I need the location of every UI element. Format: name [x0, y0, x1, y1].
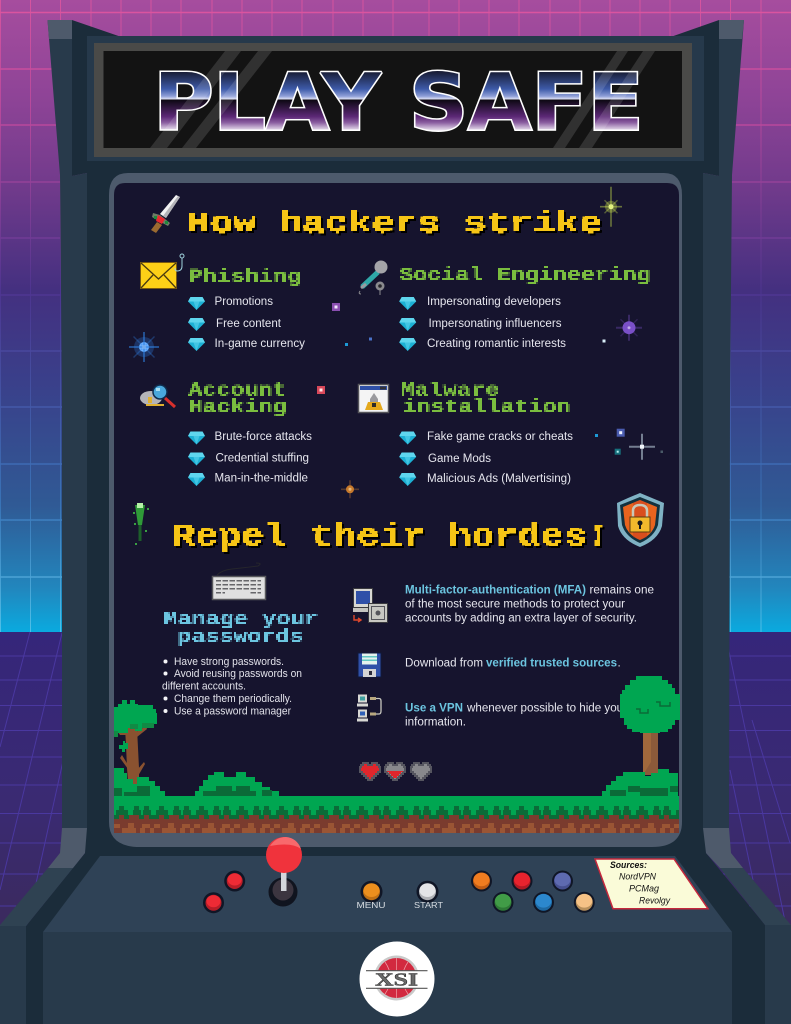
left tree: [114, 700, 157, 795]
icon: sword: [151, 195, 180, 233]
list: password tips: Have strong passwords.: [174, 656, 284, 668]
text: vpn: information.: [405, 717, 466, 729]
list: password tips: [162, 656, 302, 718]
list: password tips: Avoid reusing passwords on: [174, 668, 302, 680]
heading: Social Engineering: Social Engineering: [399, 264, 650, 286]
heading: Malware installation: [400, 379, 570, 418]
icon: window with rocket: [358, 384, 388, 412]
buttons: right colour cluster: [471, 870, 595, 913]
text: mfa: remains one: [590, 584, 654, 596]
heading: Manage your passwords: [163, 608, 318, 648]
text: vpn: Use a VPN: [405, 703, 463, 715]
panel: manage your passwords: [162, 563, 318, 718]
list: phishing methods: In-game currency: [214, 338, 305, 350]
icon: computer and safe: [353, 588, 388, 622]
heading: Repel their hordes!: Repel their hordes!: [172, 520, 610, 555]
panel: mfa advice: [353, 584, 654, 624]
sources note: [595, 859, 708, 909]
button: menu: [356, 881, 386, 910]
buttons: left red pair: [203, 870, 245, 913]
list: password tips: different accounts.: [162, 680, 246, 692]
icon: networked computers: [357, 694, 381, 722]
heading: Account Hacking: Hacking: [188, 396, 286, 418]
button: start: [414, 881, 443, 910]
star field: [129, 187, 663, 498]
marquee with title: [87, 36, 704, 161]
icon: floppy disk: [358, 653, 381, 677]
right tree: [620, 676, 680, 775]
icon: envelope with hook: [140, 254, 184, 288]
list: social engineering methods: [399, 296, 566, 351]
logo: XSI: XSI: [375, 970, 418, 990]
text: mfa: accounts by adding an extra layer of security.: [405, 612, 637, 624]
text: vpn: whenever possible to hide your: [466, 703, 627, 715]
heading: Phishing: Phishing: [188, 266, 301, 288]
heading: Malware installation: Malware: [400, 379, 499, 401]
text: verified sources: [405, 658, 621, 670]
heading: Malware installation: installation: [402, 396, 570, 418]
list: account hacking methods: Credential stuffing: [216, 453, 309, 465]
bushes: [114, 768, 678, 796]
list: malware methods: [399, 431, 573, 486]
panel: trusted sources advice: [358, 653, 621, 677]
panel: vpn advice: [357, 694, 627, 729]
heading: How hackers strike: How hackers strike: [187, 207, 602, 242]
sources note: PCMag: [629, 884, 660, 894]
pixel scenery: [114, 676, 680, 833]
icon: life hearts: [360, 763, 431, 780]
panel: social engineering: [359, 260, 650, 351]
list: account hacking methods: Brute-force attacks: [214, 431, 312, 443]
icon: disk under magnifier: [140, 385, 175, 407]
panel: account hacking: [140, 379, 312, 486]
text: verified sources: Download from: [405, 658, 483, 670]
list: malware methods: Game Mods: [428, 453, 491, 465]
list: password tips: Change them periodically.: [174, 693, 292, 705]
sources note: Sources:: [610, 860, 647, 871]
text: mfa: [405, 584, 654, 624]
control panel: [43, 837, 732, 1024]
panel: phishing: [140, 254, 305, 351]
text: vpn: [405, 703, 627, 729]
list: account hacking methods: Man-in-the-middle: [214, 473, 308, 485]
icon: padlock shield: [617, 493, 664, 547]
list: malware methods: Malicious Ads (Malvertising): [427, 473, 571, 485]
heading: Manage your passwords: Manage your: [163, 608, 318, 630]
list: account hacking methods: [188, 431, 312, 486]
heading: Account Hacking: [188, 379, 286, 418]
game screen: [114, 183, 680, 833]
list: phishing methods: Free content: [216, 318, 282, 330]
icon: green falling comet: [133, 503, 149, 545]
list: phishing methods: Promotions: [214, 296, 273, 308]
list: phishing methods: [188, 296, 305, 351]
ground: [114, 796, 679, 833]
screen bezel: [109, 173, 682, 847]
list: social engineering methods: Impersonating developers: [427, 296, 561, 308]
sources note: NordVPN: [619, 872, 656, 882]
icon: keyboard: [212, 563, 266, 600]
list: social engineering methods: Impersonating influencers: [428, 318, 562, 330]
heading: Manage your passwords: passwords: [177, 626, 303, 648]
button: start: START: [414, 900, 443, 910]
joystick: [266, 837, 302, 906]
list: malware methods: Fake game cracks or cheats: [427, 431, 573, 443]
heading: Account Hacking: Account: [188, 379, 286, 401]
text: mfa: Multi-factor-authentication (MFA): [405, 584, 586, 596]
logo: XSI: [360, 942, 434, 1016]
text: verified sources: verified trusted sources: [486, 658, 617, 670]
title: PLAY SAFE: PLAY SAFE: [154, 58, 644, 148]
sources note: Revolgy: [639, 896, 671, 906]
list: password tips: Use a password manager: [174, 706, 291, 718]
icon: microphone: [359, 260, 388, 295]
panel: malware installation: [358, 379, 573, 486]
text: mfa: of the most secure methods to protect your: [405, 598, 625, 610]
button: menu: MENU: [356, 900, 386, 910]
text: verified sources: .: [618, 658, 621, 670]
list: social engineering methods: Creating romantic interests: [427, 338, 566, 350]
